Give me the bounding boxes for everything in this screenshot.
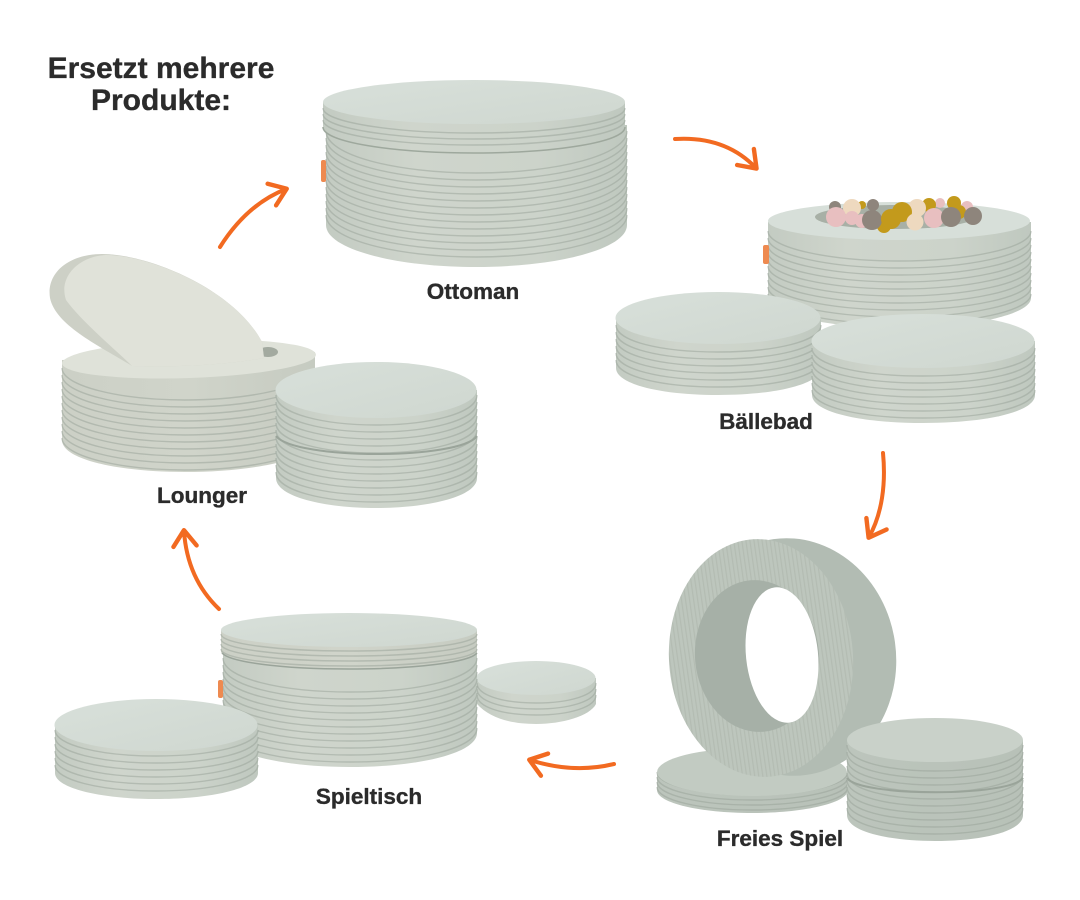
- left cushion: [54, 699, 258, 799]
- ottoman lid: [323, 80, 625, 153]
- lounger ring: [61, 336, 317, 472]
- label: ottoman: Ottoman: [427, 279, 519, 304]
- small cushion: [476, 661, 596, 724]
- ball pit ring: [768, 202, 1031, 328]
- ottoman base: [326, 125, 627, 267]
- arrow: lounger to ottoman: [220, 189, 286, 247]
- label: spieltisch: Spieltisch: [316, 784, 422, 809]
- table base: [223, 650, 477, 767]
- title: Produkte:: [91, 84, 231, 117]
- label: lounger: Lounger: [157, 483, 247, 508]
- flat disc: [657, 748, 848, 813]
- title: [48, 52, 274, 117]
- label: freies spiel: Freies Spiel: [717, 826, 843, 851]
- orange tag: [321, 160, 326, 182]
- product: baellebad: [616, 196, 1035, 434]
- right cushion: [812, 314, 1035, 423]
- table lid: [221, 613, 477, 669]
- arrow: freies spiel to spieltisch: [530, 760, 614, 768]
- product: lounger: [50, 254, 477, 508]
- product: ottoman: [321, 80, 627, 304]
- orange tag: [763, 245, 769, 264]
- standing ring: [661, 524, 912, 790]
- product: freies spiel: [657, 524, 1023, 851]
- label: baellebad: Bällebad: [719, 409, 813, 434]
- arrow: baellebad to freies spiel: [869, 453, 884, 537]
- left cushion: [616, 292, 821, 395]
- title: Ersetzt mehrere: [48, 52, 274, 85]
- stacked cushions: [847, 718, 1023, 841]
- orange tag: [218, 680, 223, 698]
- balls: [826, 196, 982, 233]
- product: spieltisch: [54, 613, 596, 809]
- stacked cushions: [276, 362, 477, 508]
- tilted cushion: [50, 254, 264, 366]
- arrow: ottoman to baellebad: [675, 139, 756, 168]
- arrow: spieltisch to lounger: [184, 531, 219, 609]
